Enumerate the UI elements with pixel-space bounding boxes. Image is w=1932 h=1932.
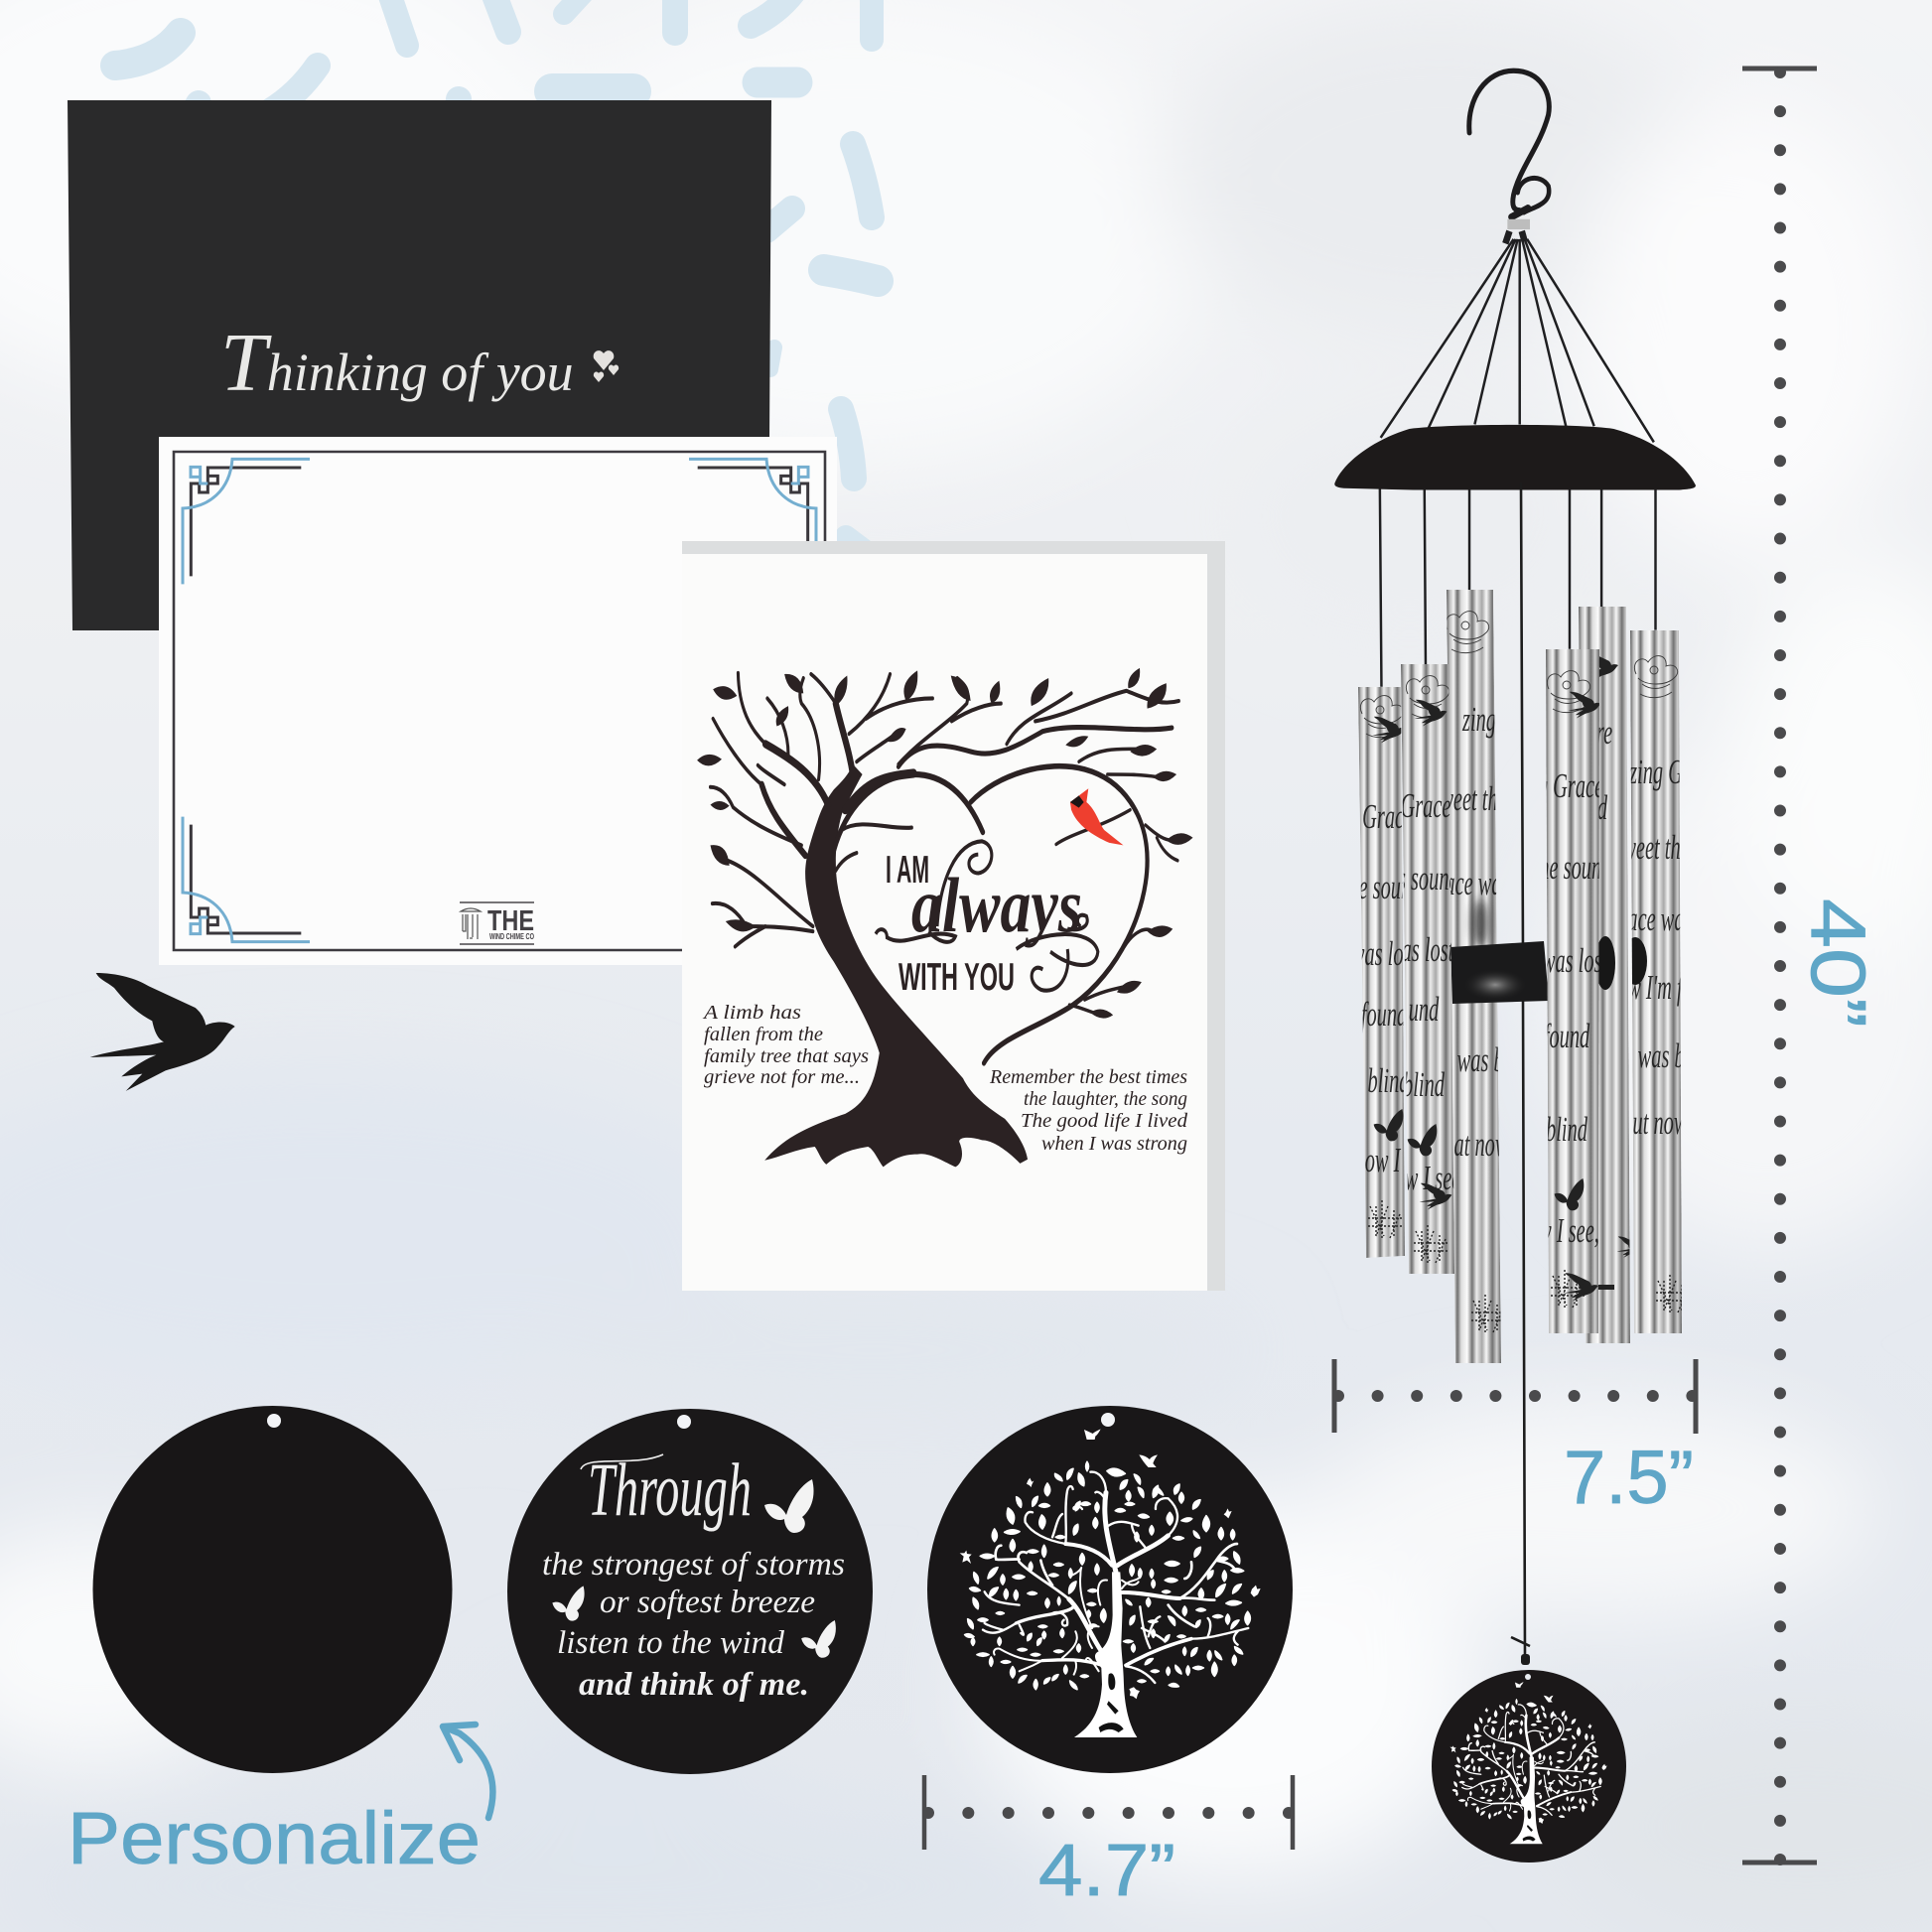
corner ornament: bottom left bbox=[183, 817, 310, 942]
tube: long center left bbox=[1447, 590, 1501, 1363]
decorative blue confetti squiggles bbox=[115, 0, 878, 551]
lettering: always: always bbox=[911, 862, 1082, 948]
tube: far right: w I'm fo bbox=[1627, 970, 1693, 1008]
small wind sail with tree bbox=[1432, 1637, 1626, 1863]
tube: left middle: w I see bbox=[1405, 1161, 1460, 1198]
tube: far right: zing Gr bbox=[1628, 755, 1692, 792]
label: Personalize: Personalize bbox=[68, 1797, 481, 1879]
icon: red cardinal bbox=[1070, 788, 1123, 845]
tube: long center left: at now bbox=[1454, 1127, 1509, 1165]
verse: right: The good life I lived bbox=[1021, 1110, 1188, 1132]
corner ornament: top left bbox=[183, 459, 310, 584]
verse: left: A limb has bbox=[702, 1002, 801, 1024]
hole in blank disc bbox=[267, 1414, 281, 1428]
tube: front right: was lost bbox=[1542, 943, 1608, 981]
verse lines: the strongest of storms bbox=[542, 1547, 845, 1583]
tube: left middle: is sound bbox=[1392, 861, 1459, 898]
tube: far left bbox=[1358, 687, 1405, 1258]
tube: left middle: und bbox=[1409, 992, 1440, 1030]
verse: left bbox=[702, 1002, 869, 1088]
icon: swallow bird bbox=[90, 973, 235, 1091]
tube: far right: ut now bbox=[1633, 1105, 1688, 1143]
tube: left middle: blind bbox=[1403, 1067, 1446, 1105]
tube: front right: w I see, bbox=[1538, 1213, 1599, 1251]
brand logo: WIND CHIME CO bbox=[489, 932, 534, 941]
tube: far left: g Grace bbox=[1347, 799, 1413, 837]
dark greeting card envelope bbox=[68, 100, 771, 630]
icon: small hearts bbox=[594, 350, 619, 382]
tube: front right: found bbox=[1544, 1019, 1590, 1056]
tube: far left: the sound bbox=[1343, 870, 1422, 907]
lettering flourishes bbox=[876, 841, 1098, 991]
tube: back right: d bbox=[1597, 790, 1608, 828]
verse lines: and think of me. bbox=[579, 1667, 809, 1703]
verse lines: listen to the wind bbox=[557, 1625, 784, 1661]
black disc with verse bbox=[507, 1409, 873, 1774]
tube: front right bbox=[1546, 649, 1599, 1333]
tube: front right: g Grace bbox=[1538, 768, 1603, 806]
verse lines: or softest breeze bbox=[600, 1585, 815, 1620]
label: 4.7 inches: 4.7” bbox=[1038, 1829, 1175, 1911]
ball behind right tube bbox=[1595, 936, 1615, 990]
verse: Through bbox=[581, 1449, 752, 1532]
verse: Through: Through bbox=[588, 1449, 752, 1532]
verse: right bbox=[989, 1066, 1188, 1155]
tube: back right bbox=[1579, 607, 1630, 1343]
lettering: I AM: I AM bbox=[886, 849, 929, 892]
tree illustration bbox=[697, 668, 1193, 1167]
verse: left: fallen from the bbox=[704, 1024, 823, 1045]
width dimension: 4.7 bbox=[924, 1775, 1293, 1850]
arrow to blank disc bbox=[443, 1725, 492, 1818]
tube: long center left: ace wa bbox=[1445, 866, 1502, 903]
tube: long center left: weet the bbox=[1440, 781, 1507, 819]
verse: right: Remember the best times bbox=[989, 1066, 1187, 1088]
icons: butterflies bbox=[552, 1479, 836, 1658]
tube: far left: was lost bbox=[1351, 936, 1418, 974]
width dimension: 7.5 bbox=[1334, 1359, 1696, 1434]
label: 40 inches: 40” bbox=[1795, 898, 1882, 1028]
hanging strings bbox=[1380, 219, 1656, 687]
tube: left middle bbox=[1401, 664, 1454, 1274]
center clapper box bbox=[1450, 941, 1549, 1004]
lettering: WITH YOU: WITH YOU bbox=[898, 956, 1015, 999]
verse: left: grieve not for me... bbox=[704, 1066, 860, 1088]
wind chime bbox=[1334, 70, 1696, 1863]
white message card bbox=[159, 437, 837, 965]
tube: back right: re bbox=[1596, 715, 1612, 753]
tube: front right: blind bbox=[1546, 1112, 1588, 1150]
tube: far left: now I s bbox=[1355, 1143, 1413, 1180]
canopy bbox=[1334, 425, 1696, 490]
tube: far left: found bbox=[1361, 997, 1408, 1035]
brand logo: THE bbox=[487, 905, 534, 937]
hook bbox=[1469, 70, 1549, 217]
tube: far left: s blind bbox=[1355, 1063, 1410, 1101]
tube: left middle: Grace bbox=[1401, 788, 1450, 826]
verse: left: family tree that says bbox=[704, 1045, 869, 1067]
brand logo bbox=[460, 902, 534, 944]
card text: Thinking of you: Thinking of you bbox=[220, 317, 574, 409]
tube: left middle: as lost bbox=[1402, 932, 1454, 970]
verse: right: when I was strong bbox=[1041, 1133, 1187, 1155]
memorial card with heart tree bbox=[682, 541, 1225, 1291]
tube: far right: race was bbox=[1619, 901, 1693, 939]
tube: far right bbox=[1630, 630, 1682, 1333]
black disc with tree of life bbox=[927, 1406, 1293, 1773]
card inner border bbox=[174, 452, 825, 950]
tube: far right: weet the bbox=[1622, 830, 1690, 868]
verse: right: the laughter, the song bbox=[1024, 1088, 1187, 1110]
tube: long center left: was bl bbox=[1457, 1042, 1509, 1080]
verse lines bbox=[542, 1547, 845, 1703]
blank black disc bbox=[93, 1406, 453, 1773]
tube: long center left: zing bbox=[1461, 702, 1496, 740]
label: 7.5 inches: 7.5” bbox=[1564, 1436, 1694, 1520]
height dimension bbox=[1742, 69, 1817, 1863]
corner ornament: top right bbox=[689, 459, 816, 584]
center string bbox=[1521, 483, 1525, 1659]
tube: far right: was bl bbox=[1638, 1038, 1690, 1076]
tube: front right: the sound bbox=[1534, 850, 1612, 888]
